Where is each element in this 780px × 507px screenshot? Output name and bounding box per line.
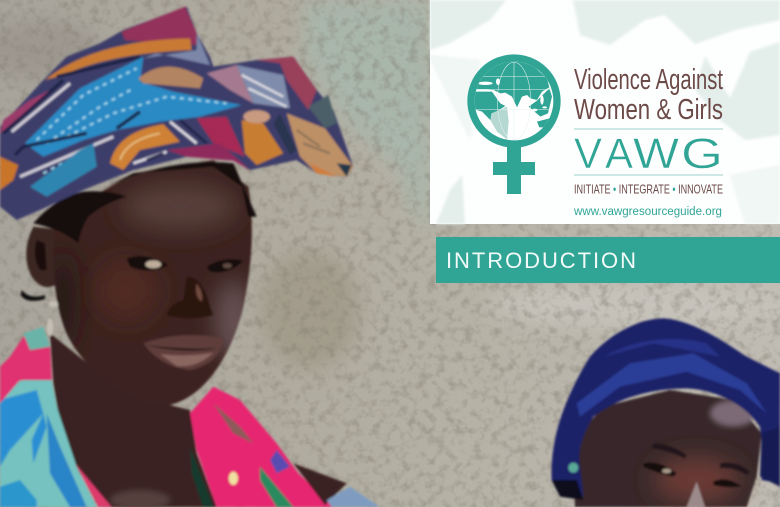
logo acronym: G [681, 130, 723, 178]
maroon front [197, 117, 245, 157]
hair [33, 191, 127, 243]
logo tagline: INITIATE • INTEGRATE • INNOVATE [574, 182, 723, 196]
faint world map [430, 0, 780, 224]
face [53, 160, 252, 405]
striped tail [207, 65, 253, 103]
ring [471, 58, 557, 144]
headwrap [552, 318, 780, 497]
mouth [143, 335, 223, 370]
stripes [133, 122, 197, 163]
logo acronym: A [605, 130, 633, 178]
white speckle [37, 68, 227, 173]
panel: logo card [430, 0, 780, 224]
logo acronym [574, 130, 723, 178]
face [573, 390, 762, 507]
navy stripes left [12, 83, 113, 177]
neck and chest [50, 333, 217, 507]
photo: woman with patterned headwrap [0, 7, 380, 507]
logo acronym: W [633, 130, 679, 178]
globe [471, 58, 557, 144]
logo acronym: V [574, 130, 602, 178]
logo: globe and female symbol [471, 58, 557, 194]
earring [47, 301, 58, 336]
left wrap cloth [0, 327, 112, 507]
logo title [574, 64, 723, 126]
logo title: Women & Girls [574, 94, 723, 126]
hair braid [21, 290, 45, 301]
lower blue [30, 143, 97, 197]
orange arcs [110, 124, 180, 170]
orange left edge [0, 157, 18, 190]
symbol stem and crossbar [493, 144, 535, 194]
website address: www.vawgresourceguide.org [573, 206, 722, 218]
grey-blue stripes on crown [143, 33, 210, 65]
earring [568, 463, 578, 473]
maroon left [0, 90, 50, 133]
maroon crown [122, 7, 197, 45]
nose [167, 277, 213, 318]
bright blue [25, 57, 242, 157]
shoulder strap and striped cloth [293, 463, 347, 505]
banner: introduction [436, 237, 780, 283]
eyes [127, 256, 168, 270]
banner: introduction: INTRODUCTION [446, 248, 636, 273]
headwrap [0, 7, 353, 220]
pink scarf [190, 387, 333, 507]
orange knot [242, 120, 283, 165]
ear [26, 227, 62, 287]
photo: second woman with blue headwrap [552, 318, 780, 507]
orange band [45, 38, 192, 80]
tan folded [138, 67, 203, 88]
